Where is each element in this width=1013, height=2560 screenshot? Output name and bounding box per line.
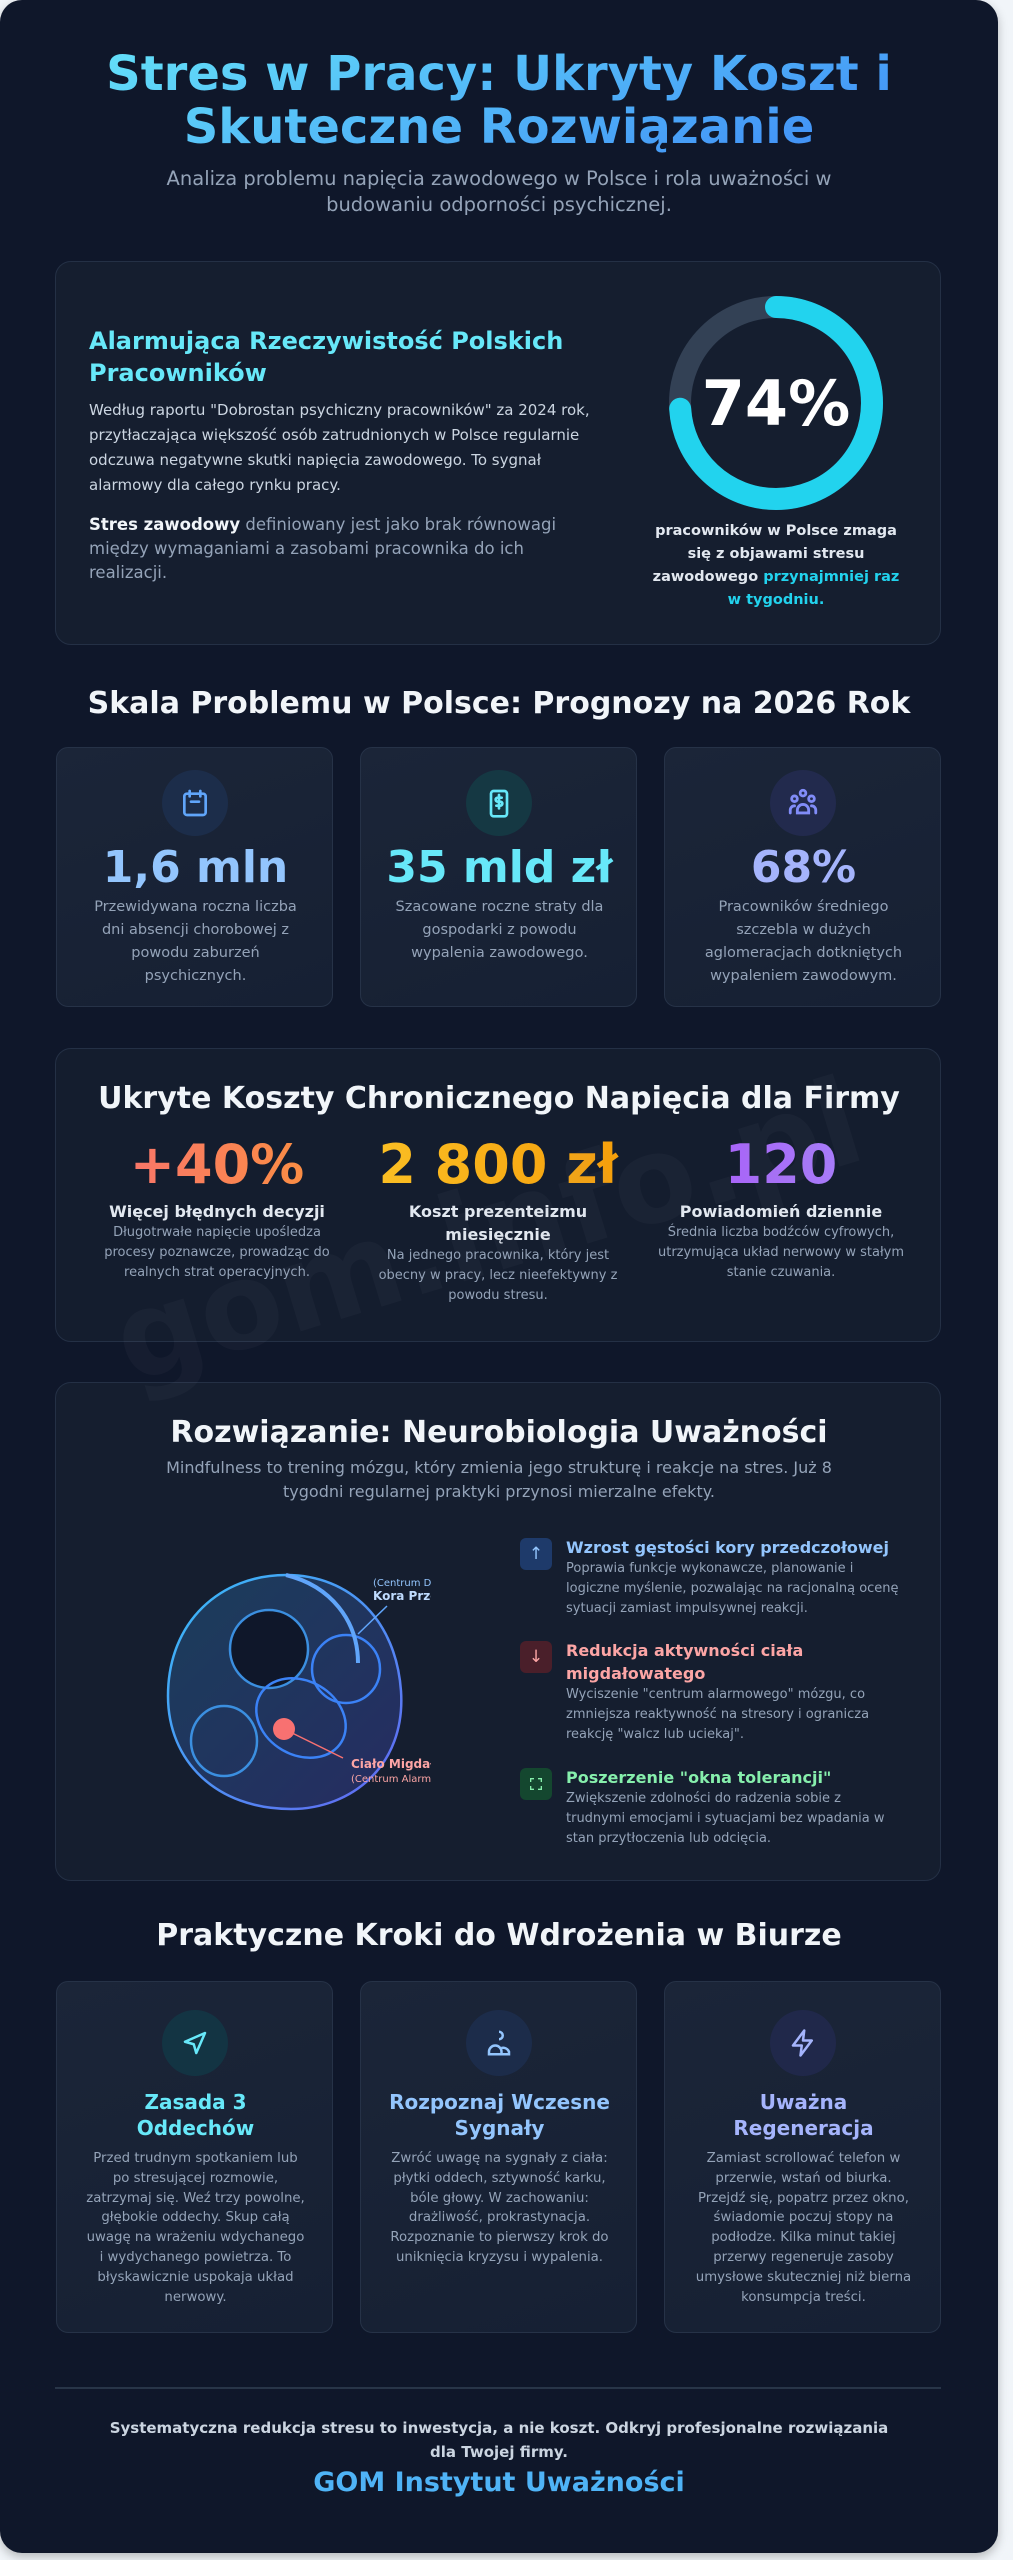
panel: stat 2 [360, 747, 637, 1007]
list item: tolerance window [520, 1768, 885, 1846]
callout: donut caption: pracowników w Polsce zmaga się z objawami stresu zawodowego przynajmniej raz w tygodniu. [653, 523, 899, 608]
text block: neuro intro: Mindfulness to trening mózgu, który zmienia jego strukturę i reakcje na stres. Już 8 tygodni regularnej praktyki przynosi mierzalne efekty. [166, 1458, 832, 1501]
text block: report: Według raportu "Dobrostan psychiczny pracowników" za 2024 rok, przytłaczająca większość osób zatrudnionych w Polsce regularnie odczuwa negatywne skutki napięcia zawodowego. To sygnał alarmowy dla całego rynku pracy. [89, 401, 590, 494]
panel: stat 1 [56, 747, 333, 1007]
footer text: Systematyczna redukcja stresu to inwestycja, a nie koszt. Odkryj profesjonalne rozwiązania dla Twojej firmy. [110, 2419, 888, 2461]
watermark: gom.info.pl [98, 1052, 878, 1411]
icon: lightning [770, 2010, 836, 2076]
title: Stres w Pracy: Ukryty Koszt i [106, 46, 892, 102]
panel: hidden costs [55, 1048, 941, 1342]
title: Skuteczne Rozwiązanie [184, 99, 814, 155]
chart: brain diagram [166, 1573, 431, 1810]
icon: phone money [466, 770, 532, 836]
panel: step 3: Uważna Regeneracja [733, 2090, 874, 2140]
icon: expand [520, 1768, 552, 1800]
text block: definition: Stres zawodowy definiowany jest jako brak równowagi między wymaganiami a zasobami pracownika do ich realizacji. [89, 515, 556, 582]
panel: step 1: Przed trudnym spotkaniem lub po stresującej rozmowie, zatrzymaj się. Weź trzy powolne, głębokie oddechy. Skup całą uwagę na wrażeniu wdychanego i wydychanego powietrza. To błyskawicznie uspokaja układ nerwowy. [86, 2151, 305, 2305]
icon: arrow down: ↓ [529, 1647, 543, 1667]
list item: tolerance window: Poszerzenie "okna tolerancji" [566, 1768, 831, 1787]
stat: +40%: +40% [130, 1133, 304, 1196]
icon: users [770, 770, 836, 836]
stat: 120: Średnia liczba bodźców cyfrowych, utrzymująca układ nerwowy w stałym stanie czuwania. [658, 1225, 904, 1280]
title [0, 48, 998, 154]
stat number: 35 mld zł [386, 842, 613, 893]
heading: practical steps: Praktyczne Kroki do Wdrożenia w Biurze [156, 1918, 842, 1953]
heading: neuro: Rozwiązanie: Neurobiologia Uważności [170, 1415, 828, 1450]
panel: step 1: Zasada 3 Oddechów [137, 2090, 254, 2140]
subtitle: Analiza problemu napięcia zawodowego w Polsce i rola uważności w budowaniu odporności psychicznej. [167, 167, 831, 216]
stat: 2 800 zł: Na jednego pracownika, który jest obecny w pracy, lecz nieefektywny z powodu stresu. [379, 1248, 617, 1303]
chart: donut 74%: 74% [702, 367, 850, 440]
icon: person [466, 2010, 532, 2076]
panel: neurobiology [55, 1382, 941, 1881]
list item: amygdala [520, 1641, 869, 1742]
stat number: 68% [751, 842, 856, 893]
list item: amygdala: Redukcja aktywności ciała migdałowatego [566, 1641, 803, 1683]
stat: +40%: Więcej błędnych decyzji [109, 1202, 325, 1221]
stat number: 1,6 mln [103, 842, 288, 893]
list item: prefrontal: Wzrost gęstości kory przedczołowej [566, 1538, 889, 1557]
chart: donut 74% [669, 296, 883, 510]
icon: calendar [162, 770, 228, 836]
list item: amygdala: Wyciszenie "centrum alarmowego" mózgu, co zmniejsza reaktywność na stresory i ogranicza reakcję "walcz lub uciekaj". [566, 1687, 869, 1742]
heading: alarming: Alarmująca Rzeczywistość Polskich Pracowników [89, 327, 563, 387]
panel: step 3 [664, 1981, 941, 2333]
stat: 120: Powiadomień dziennie [680, 1202, 882, 1221]
icon: arrow up [520, 1538, 552, 1570]
panel: stat 2: Szacowane roczne straty dla gospodarki z powodu wypalenia zawodowego. [396, 899, 603, 961]
panel: stat 3: Pracowników średniego szczebla w dużych aglomeracjach dotkniętych wypaleniem zawodowym. [705, 899, 902, 984]
panel: step 3: Zamiast scrollować telefon w przerwie, wstań od biurka. Przejdź się, popatrz przez okno, świadomie poczuj stopy na podłodze. Kilka minut takiej przerwy regeneruje zasoby umysłowe skuteczniej niż bierna konsumpcja treści. [696, 2151, 911, 2305]
stat: 120: 120 [725, 1133, 837, 1196]
footer brand: GOM Instytut Uważności [313, 2467, 685, 2498]
panel: step 2: Rozpoznaj Wczesne Sygnały [389, 2090, 610, 2140]
icon: navigation [162, 2010, 228, 2076]
icon: arrow down [520, 1641, 552, 1673]
stat: 2 800 zł [378, 1133, 619, 1303]
heading: scale: Skala Problemu w Polsce: Prognozy na 2026 Rok [88, 686, 910, 721]
stat: +40% [104, 1133, 330, 1280]
list item: prefrontal: Poprawia funkcje wykonawcze, planowanie i logiczne myślenie, pozwalając na racjonalną ocenę sytuacji zamiast impulsywnej reakcji. [566, 1561, 899, 1616]
stat: 120 [658, 1133, 904, 1280]
panel: alarming reality [55, 261, 941, 645]
stat: 2 800 zł: Koszt prezenteizmu miesięcznie [409, 1202, 587, 1244]
panel: stat 1: Przewidywana roczna liczba dni absencji chorobowej z powodu zaburzeń psychicznych. [94, 899, 297, 984]
stat: +40%: Długotrwałe napięcie upośledza procesy poznawcze, prowadząc do realnych strat operacyjnych. [104, 1225, 330, 1280]
panel: step 2 [360, 1981, 637, 2333]
panel: step 1 [56, 1981, 333, 2333]
stat: 2 800 zł: 2 800 zł [378, 1133, 618, 1196]
panel: stat 3 [664, 747, 941, 1007]
list item: tolerance window: Zwiększenie zdolności do radzenia sobie z trudnymi emocjami i sytuacjami bez wpadania w stan przytłoczenia lub odcięcia. [566, 1791, 885, 1846]
panel: step 2: Zwróć uwagę na sygnały z ciała: płytki oddech, sztywność karku, bóle głowy. W zachowaniu: drażliwość, prokrastynacja. Rozpoznanie to pierwszy krok do uniknięcia kryzysu i wypalenia. [390, 2151, 609, 2265]
list item: prefrontal [520, 1538, 899, 1616]
icon: arrow up: ↑ [529, 1544, 543, 1564]
heading: hidden costs: Ukryte Koszty Chronicznego Napięcia dla Firmy [98, 1081, 900, 1116]
